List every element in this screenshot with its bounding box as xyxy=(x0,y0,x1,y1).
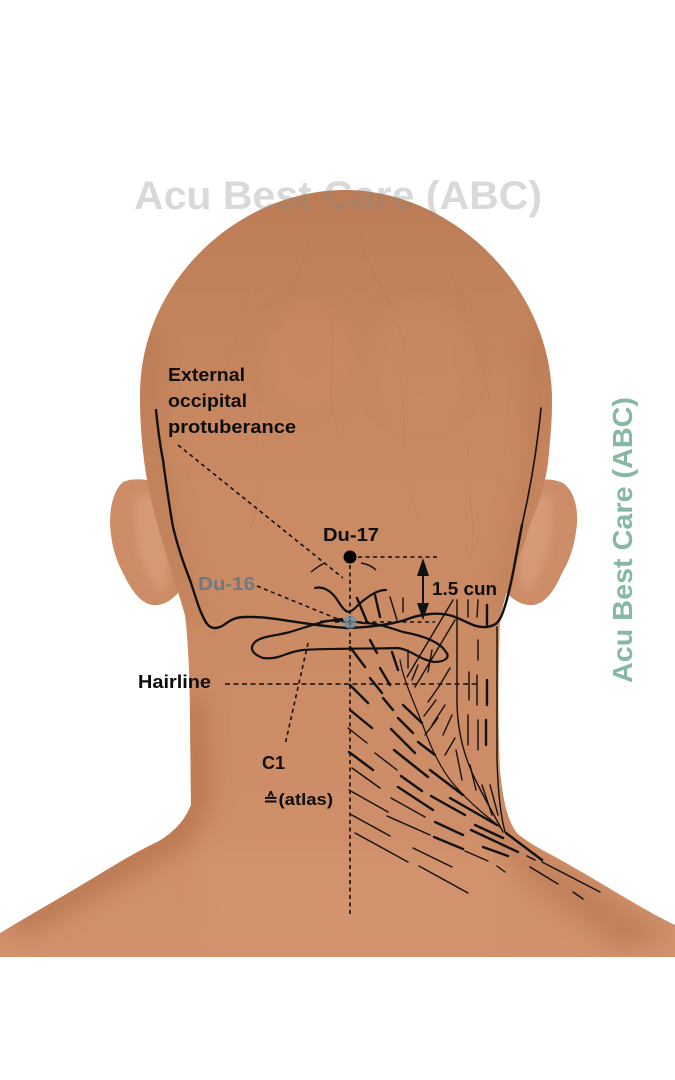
label: C1: C1 xyxy=(262,753,285,773)
label: external occipital protuberance: protuberance xyxy=(168,417,296,437)
label: 1.5 cun: 1.5 cun xyxy=(432,579,497,599)
C1 atlas outline xyxy=(252,619,448,662)
point: Du-17 xyxy=(344,550,356,564)
leader: Du-16 xyxy=(257,586,345,622)
label: Du-16: Du-16 xyxy=(198,574,255,594)
figure: head, neck and shoulders xyxy=(0,185,675,960)
leader: external occipital protuberance xyxy=(178,445,343,578)
label: hairline: Hairline xyxy=(138,672,211,692)
occipital protuberance arcs xyxy=(311,563,376,572)
watermark: right vertical: Acu Best Care (ABC) xyxy=(607,397,638,683)
dotted midline xyxy=(349,565,351,917)
shading: skin tones xyxy=(0,300,670,950)
hairline outline xyxy=(156,408,541,628)
label: atlas: ≙(atlas) xyxy=(263,790,333,809)
icon: right ear xyxy=(507,480,578,606)
infographic: back of head and neck acupoint diagram xyxy=(0,180,675,957)
leader: Du-17 level xyxy=(358,556,437,558)
leader: hairline level xyxy=(225,683,480,685)
label: external occipital protuberance xyxy=(168,365,296,437)
leader: C1 xyxy=(285,643,308,745)
icon: left ear xyxy=(110,479,178,606)
watermark: top: Acu Best Care (ABC) xyxy=(134,174,542,218)
point: Du-16 xyxy=(344,616,356,628)
label: external occipital protuberance: External xyxy=(168,365,245,385)
arrow: 1.5 cun distance xyxy=(417,558,429,620)
hair texture xyxy=(215,235,490,560)
skull base curve xyxy=(315,587,386,612)
leader: Du-16 level xyxy=(335,621,435,623)
body silhouette xyxy=(0,185,675,960)
muscle fibre strokes xyxy=(348,595,600,899)
label: Du-17: Du-17 xyxy=(323,525,379,545)
label: external occipital protuberance: occipital xyxy=(168,391,247,411)
